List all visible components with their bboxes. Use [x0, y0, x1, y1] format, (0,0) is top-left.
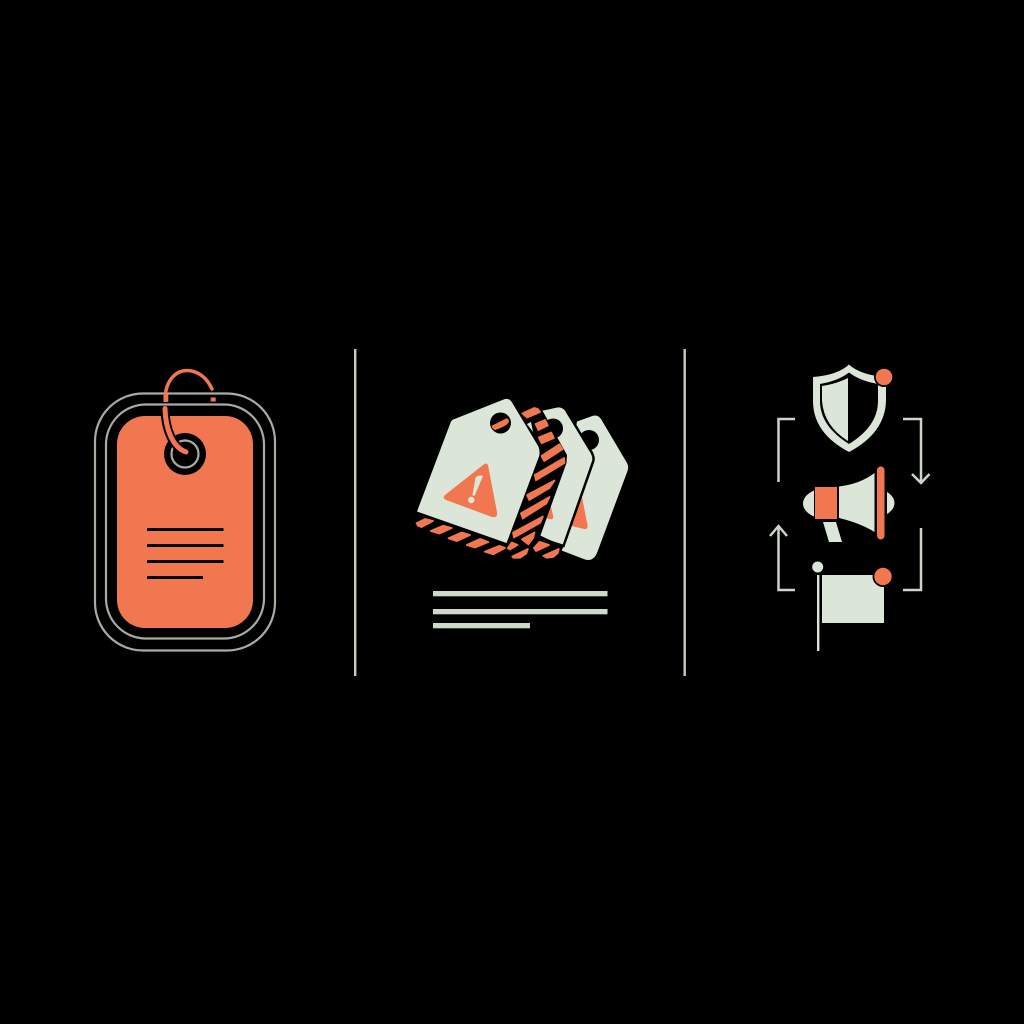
back tag	[555, 415, 628, 560]
shield badge	[874, 367, 894, 387]
front tag	[416, 398, 540, 544]
megaphone icon	[803, 466, 894, 542]
striped tag silhouette	[505, 405, 567, 552]
exclamation mark	[468, 476, 483, 503]
front tag band	[416, 519, 505, 554]
striped tag stripes	[508, 408, 564, 558]
panel: single orange tag	[95, 370, 275, 650]
shield icon	[813, 364, 894, 452]
sliver of third tag	[527, 422, 533, 432]
outer ring	[95, 394, 275, 650]
tag text lines	[147, 528, 224, 579]
panel: warning tags stack	[416, 398, 628, 628]
tag hole	[164, 433, 206, 475]
inner ring	[106, 404, 264, 638]
orange tag body	[117, 416, 253, 628]
black gap under third tag	[505, 533, 564, 561]
bracket arrows	[770, 419, 930, 590]
flag icon	[812, 562, 894, 651]
divider right	[684, 349, 686, 676]
divider left	[354, 349, 356, 676]
panel: shield, megaphone, flag cycle	[770, 364, 930, 651]
string	[164, 370, 216, 452]
front tag hole	[490, 412, 511, 434]
third tag	[526, 406, 594, 546]
warning triangle	[444, 464, 497, 517]
caption lines	[433, 591, 608, 628]
